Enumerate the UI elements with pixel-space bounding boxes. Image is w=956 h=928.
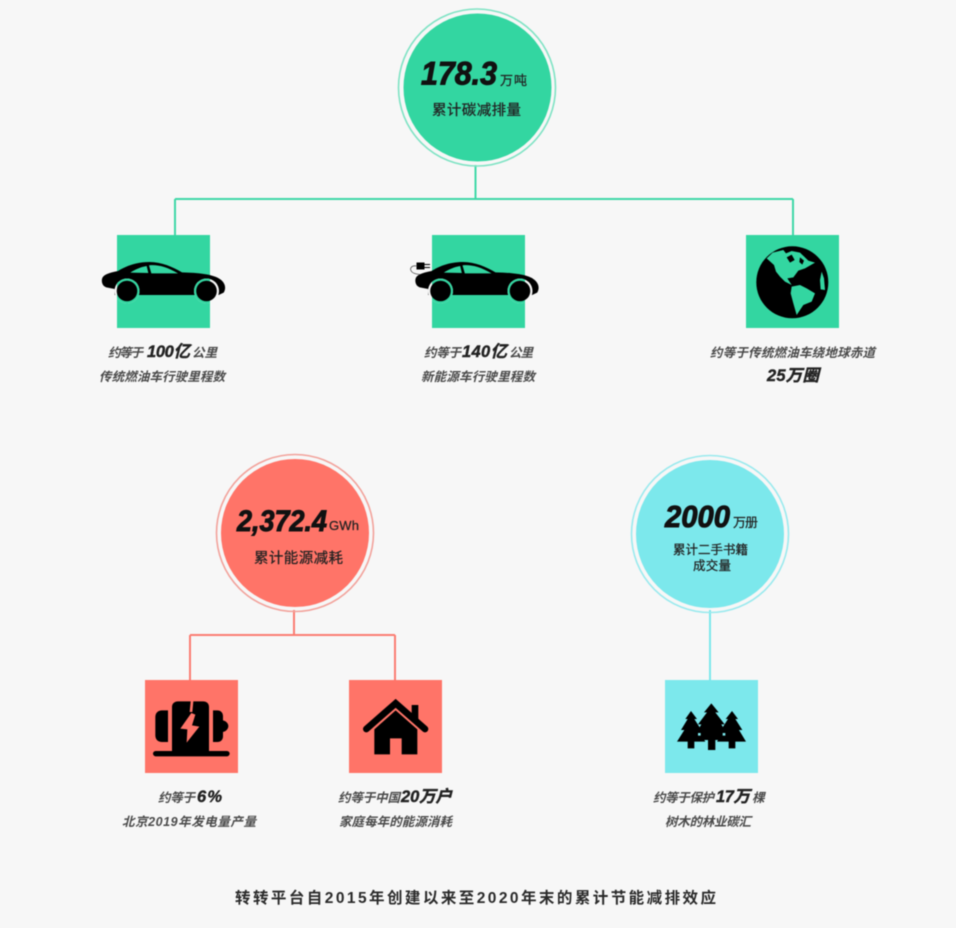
panel: households	[338, 680, 454, 829]
panel: energy reduction circle: GWh	[329, 518, 359, 533]
panel: forest	[653, 680, 767, 829]
panel: petrol car	[99, 235, 227, 384]
connector: books tree	[709, 610, 711, 680]
label: trees protected: 树木的林业碳汇	[665, 815, 753, 829]
panel: energy reduction circle	[216, 454, 374, 612]
label: equator laps: 约等于传统燃油车绕地球赤道	[710, 346, 877, 360]
label: petrol car mileage	[99, 343, 227, 384]
label: petrol car mileage: 公里	[192, 346, 218, 360]
label: equator laps: 25万圈	[766, 367, 822, 385]
footer note: 转转平台自2015年创建以来至2020年末的累计节能减排效应	[235, 888, 716, 907]
label: households: 20万户	[400, 787, 454, 806]
icon: petrol car	[102, 235, 225, 328]
carbon figure: 178.3	[421, 56, 497, 92]
energy caption: 累计能源减耗	[254, 550, 344, 567]
panel: books circle: 成交量	[693, 558, 731, 573]
label: electric car mileage: 公里	[509, 346, 534, 360]
label: power share: 6%	[197, 788, 222, 806]
connector: energy tree	[190, 610, 395, 680]
panel: books circle: 万册	[733, 515, 758, 530]
label: trees protected: 约等于保护	[653, 791, 715, 805]
carbon caption: 累计碳减排量	[432, 102, 521, 119]
panel: books circle	[632, 456, 788, 612]
label: power share: 约等于	[158, 791, 196, 805]
panel: carbon reduction circle	[398, 9, 556, 166]
label: trees protected: 棵	[752, 791, 767, 805]
books figure: 2000	[664, 499, 730, 534]
icon: generator	[145, 680, 238, 773]
panel: power generation	[122, 680, 257, 829]
label: trees protected: 17万	[716, 788, 752, 806]
label: power share	[122, 788, 257, 829]
icon: house	[349, 680, 442, 773]
label: electric car mileage: 新能源车行驶里程数	[421, 370, 537, 384]
label: petrol car mileage: 传统燃油车行驶里程数	[99, 370, 227, 384]
label: petrol car mileage: 约等于	[108, 346, 144, 360]
label: petrol car mileage: 100亿	[147, 343, 192, 361]
label: electric car mileage	[421, 343, 537, 384]
label: households: 家庭每年的能源消耗	[339, 815, 453, 829]
label: households	[338, 787, 454, 829]
panel: carbon reduction circle: 万吨	[500, 73, 527, 88]
energy figure: 2,372.4	[236, 505, 327, 538]
label: households: 约等于中国	[338, 791, 402, 805]
label: equator laps	[710, 346, 877, 385]
icon: electric car with plug	[411, 235, 539, 328]
connector: carbon tree	[175, 165, 793, 235]
panel: earth equator	[710, 235, 877, 385]
books caption: 累计二手书籍	[673, 542, 748, 557]
label: electric car mileage: 约等于	[424, 346, 462, 360]
label: electric car mileage: 140亿	[462, 343, 510, 361]
panel: electric car	[411, 235, 539, 384]
label: power share: 北京2019年发电量产量	[122, 815, 257, 829]
icon: trees	[665, 680, 758, 773]
icon: globe	[746, 235, 839, 328]
label: trees protected	[653, 788, 767, 829]
